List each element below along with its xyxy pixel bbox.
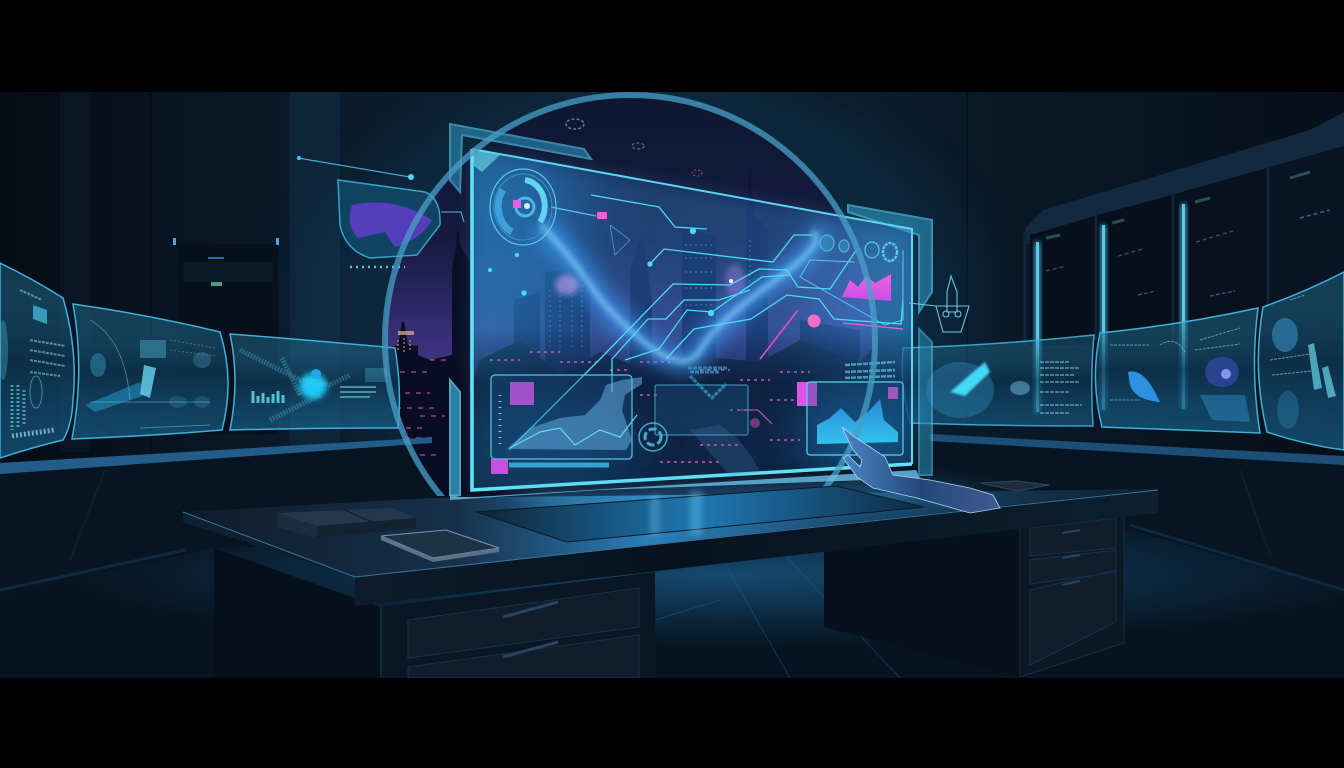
left ledge — [0, 437, 432, 474]
room: walls and floor — [0, 80, 1344, 678]
desk mat — [476, 486, 924, 542]
center mini panel and gauge — [639, 368, 760, 476]
hand and arm touching screen — [842, 427, 1000, 513]
scene: holographic control room — [0, 92, 1344, 678]
tablet — [381, 530, 499, 562]
energy swirl — [541, 225, 816, 361]
panel: right left — [902, 335, 1094, 426]
ghost hand — [507, 377, 642, 450]
holographic frame brackets — [450, 124, 932, 495]
panel: far left — [0, 263, 74, 458]
bottom left chart panel — [491, 375, 642, 465]
circuit lines — [488, 195, 903, 450]
rack light bars — [1035, 204, 1186, 412]
bottom right chart panel — [807, 362, 903, 455]
main holographic screen — [460, 149, 930, 497]
city skyline — [386, 226, 874, 496]
small rocket schematic — [909, 276, 969, 332]
panel: left middle — [72, 304, 228, 439]
small desk device right — [980, 481, 1049, 491]
floor cabinets and desk — [183, 470, 1158, 678]
right ledge — [930, 434, 1344, 465]
panel: far right — [1258, 272, 1344, 450]
holographic circle ring — [382, 92, 878, 496]
screen base glow — [450, 470, 920, 500]
top right gauges — [800, 235, 903, 325]
radar dial — [490, 169, 556, 245]
server racks right — [1025, 112, 1344, 345]
holographic mini map — [297, 156, 464, 267]
magenta accents — [491, 212, 903, 474]
left side holographic panels — [0, 263, 432, 474]
back wall cabinet — [173, 238, 279, 434]
right side holographic panels — [902, 204, 1344, 465]
panel: left right — [230, 334, 399, 430]
panel: right middle — [1095, 308, 1260, 433]
left pedestal — [214, 548, 655, 678]
rack status lights — [1046, 172, 1330, 296]
desk top — [183, 489, 1158, 577]
right pedestal — [824, 512, 1124, 677]
circular city window — [385, 98, 872, 496]
desk box device — [277, 508, 416, 538]
